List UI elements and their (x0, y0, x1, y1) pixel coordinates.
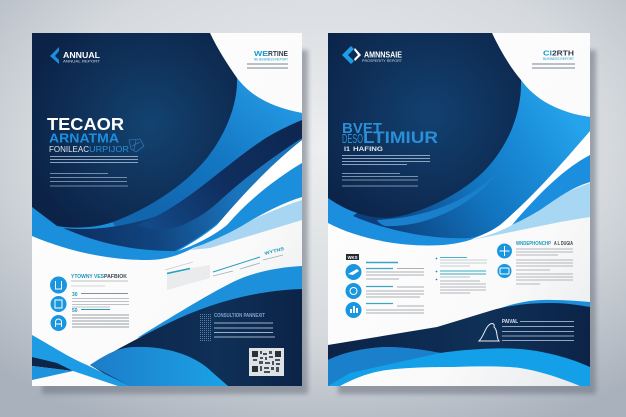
icon list right: right page (497, 241, 573, 284)
page shadows (42, 50, 596, 394)
icon: circle 2 (50, 296, 66, 312)
title: right page: I1 (344, 146, 350, 153)
icon list right: right page: WNDEPHONCHP (516, 241, 552, 247)
panel: right brochure page (328, 33, 590, 386)
navy text block: left page: CONSULTION PANNEXIT (214, 313, 265, 319)
icon list left: right page (346, 254, 424, 318)
title: right page: HAFING (353, 146, 383, 153)
title: left page: TECAOR (47, 114, 124, 134)
title: left page (47, 114, 144, 154)
navy footer right (328, 303, 590, 368)
light stripe right (470, 183, 590, 240)
list heading: YTOWNY VES (71, 274, 104, 280)
navy cover panel left (32, 33, 237, 228)
top right label: left page: NE BUSINESS REPORT (254, 58, 289, 62)
icon list: left page: 30 (72, 292, 78, 298)
checklist middle: right page (436, 258, 487, 293)
title: left page: ARNATMA (49, 130, 120, 146)
blue gradient swoosh right (353, 80, 590, 238)
navy band left (137, 120, 302, 229)
navy text block: left page (199, 313, 275, 342)
navy lower block left (90, 289, 302, 386)
icon: line doodle (129, 139, 144, 152)
top right label: right page: 2RTH (552, 48, 574, 58)
blue swoosh bottom band left (32, 78, 302, 260)
footer text: right page (479, 319, 574, 341)
footer text: right page: PAIVAL (502, 319, 518, 325)
logo: left (50, 47, 101, 64)
title: left page: FONILEAC (49, 144, 89, 154)
title: right page (342, 120, 438, 153)
top right label: right page (532, 48, 575, 68)
icon list left: right page: WKS (348, 255, 358, 260)
slanted text boxes: left page: WYTNS (264, 246, 285, 256)
panel: left brochure page (32, 33, 302, 386)
left bottom ribbons (32, 335, 130, 386)
title: right page: BVET (342, 120, 382, 137)
navy cover panel right (328, 33, 521, 218)
icon: circle chart (346, 302, 362, 318)
logo text: AMNNSAIE (364, 50, 403, 60)
blue swoosh upper left (112, 78, 302, 226)
icon list: left page (50, 274, 129, 331)
logo: left: ANNUAL REPORT (63, 58, 101, 64)
icon list right: right page: A L DUGIA (554, 241, 573, 247)
body text: right page (342, 156, 430, 186)
icon list: left page: PAFBIOK (104, 274, 127, 280)
body text: left page (50, 156, 138, 186)
blue strip above navy footer (500, 300, 590, 308)
title: right page: LTIMIUR (363, 129, 438, 147)
icon: circle megaphone (346, 264, 362, 280)
top right label: left page: WE (254, 49, 268, 58)
blue curve lower right left page (137, 266, 302, 338)
icon: circle target (346, 283, 362, 299)
icon: circle 1 (50, 276, 67, 294)
icon: chevron logo (50, 47, 59, 64)
logo: right (342, 46, 403, 64)
logo text: ANNUAL (63, 50, 100, 60)
crescent right (377, 183, 488, 226)
icon: diamond logo (342, 46, 354, 64)
top right label: right page: BUSINESS REPORT (543, 57, 575, 61)
logo: right: PROSPERITY REPORT (362, 58, 403, 63)
blue footer darker left (328, 347, 440, 386)
icon: circle 3 (50, 315, 66, 331)
slanted text boxes: left page (165, 246, 285, 290)
top right label: right page: CI (543, 48, 552, 58)
blue swoosh bottom band right (328, 80, 590, 246)
gradient inner swoosh left (63, 138, 302, 251)
icon: bell outline (479, 324, 499, 341)
top right label: left page: RTINE (268, 49, 288, 58)
icon: circle plus (497, 244, 512, 258)
white stripe right (470, 131, 590, 240)
icon: circle camera (498, 264, 512, 278)
title: right page: DESO (342, 131, 363, 146)
top right label: left page (247, 49, 289, 68)
QR code (249, 348, 284, 376)
icon: dotted pattern (199, 313, 212, 342)
icon list: left page: 50 (72, 308, 78, 314)
white stripe left (178, 140, 302, 251)
title: left page: URPIJOR (89, 144, 129, 154)
blue arc bottom (90, 347, 228, 386)
blue footer wave right (328, 347, 590, 386)
light stripe left (190, 200, 302, 250)
